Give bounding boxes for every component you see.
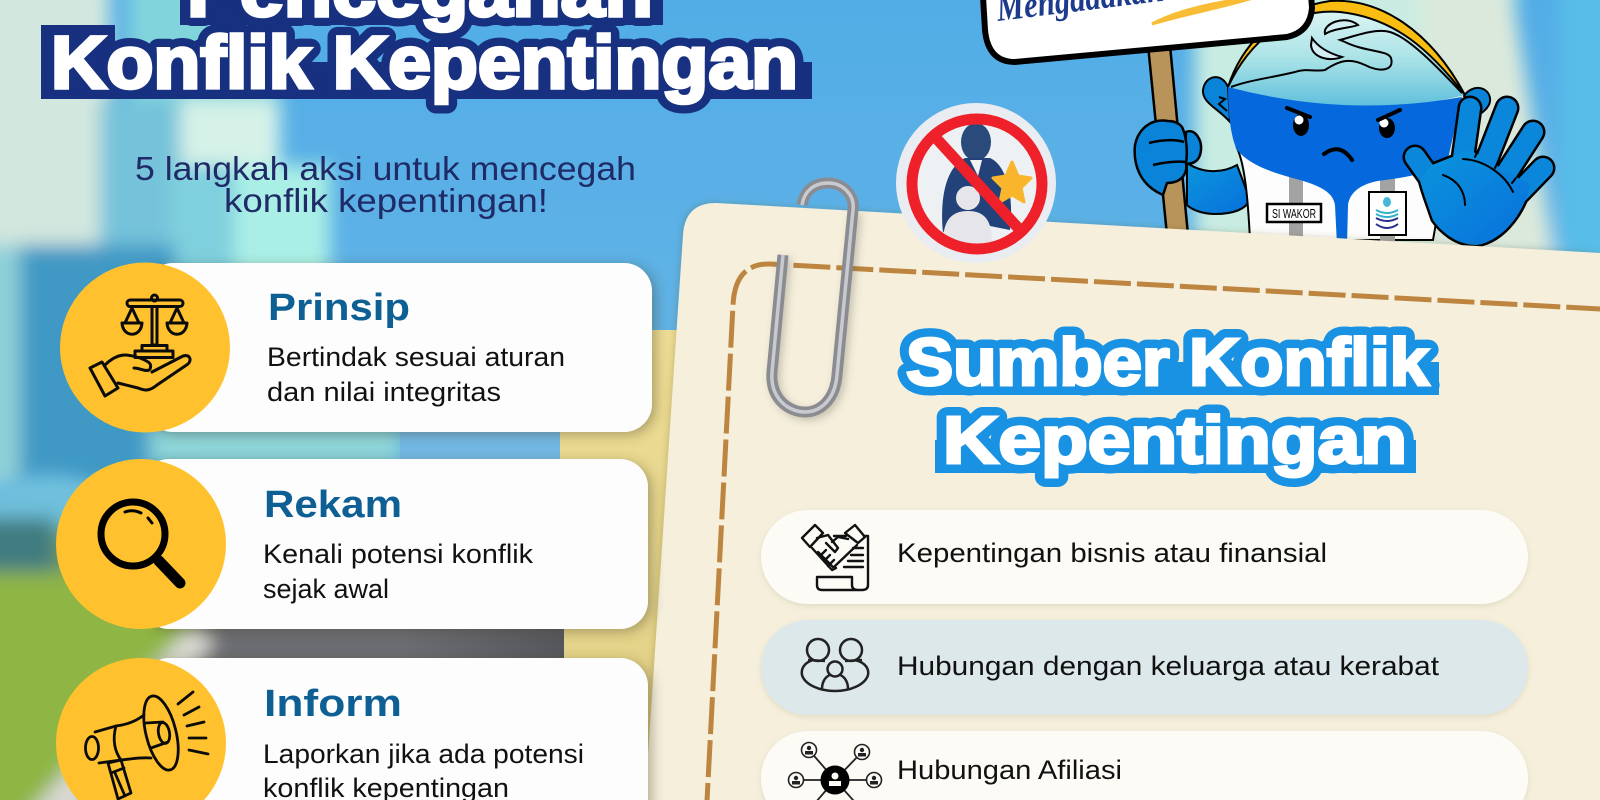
card text: dan nilai integritas (267, 377, 501, 407)
icon: sign stick (1148, 45, 1188, 235)
heading: Sumber Konflik Kepentingan: Sumber Konflik (906, 325, 1430, 400)
pill text: Hubungan dengan keluarga atau kerabat (897, 651, 1440, 681)
pill: business interests (761, 510, 1528, 604)
card heading: Rekam (264, 484, 402, 526)
mascot: Si Wakor holding a sign (1135, 1, 1543, 248)
subtitle (135, 150, 636, 219)
fist holding stick (1135, 121, 1201, 195)
card text: Bertindak sesuai aturan (267, 342, 565, 372)
raised open hand (1415, 108, 1543, 245)
title: Konflik Kepentingan (51, 21, 798, 104)
body: white coat (1237, 148, 1447, 240)
arm (1187, 163, 1250, 214)
card text: Laporkan jika ada potensi (263, 739, 584, 769)
name tag: SI WAKOR (1272, 207, 1316, 221)
icon: magnifying glass (101, 502, 180, 583)
card heading: Inform (264, 683, 402, 725)
pill: affiliation (761, 731, 1528, 800)
card: Prinsip (60, 262, 652, 432)
dome head (1228, 1, 1465, 108)
pill: family relationships (761, 620, 1528, 715)
card text (267, 342, 565, 407)
subtitle: konflik kepentingan! (224, 182, 548, 219)
pill text: Kepentingan bisnis atau finansial (897, 538, 1327, 568)
card text (263, 539, 534, 604)
water wave on head (1231, 20, 1462, 93)
heading: Sumber Konflik Kepentingan: Kepentingan (943, 403, 1407, 478)
card text: Kenali potensi konflik (263, 539, 534, 569)
ears (1203, 77, 1490, 122)
card text: sejak awal (263, 574, 389, 604)
subtitle: 5 langkah aksi untuk mencegah (135, 150, 636, 187)
pill text: Hubungan Afiliasi (897, 755, 1122, 785)
coat straps (1289, 175, 1395, 248)
panel: paper sheet (645, 203, 1600, 800)
icon: prohibition badge (896, 103, 1056, 263)
head band (1228, 1, 1465, 95)
icon: megaphone (86, 692, 208, 799)
heading: Sumber Konflik Kepentingan (906, 325, 1439, 478)
name tag (1267, 204, 1321, 222)
heading: Sumber Konflik Kepentingan: Sumber Konflik (906, 325, 1430, 400)
icon: family group (802, 639, 868, 691)
eyes, brows and mouth (1219, 97, 1400, 160)
badge with water logo (1369, 192, 1406, 235)
title: Konflik Kepentingan (51, 21, 798, 104)
card: Rekam (56, 459, 648, 629)
icon: scales on a hand (90, 295, 190, 396)
card text (263, 739, 584, 800)
icon: paperclip (772, 183, 856, 415)
card heading: Prinsip (268, 287, 410, 329)
icon: network (788, 742, 882, 800)
sign board (982, 0, 1312, 62)
face: blue mask (1228, 87, 1462, 245)
heading: Sumber Konflik Kepentingan: Kepentingan (943, 403, 1407, 478)
card: Inform (56, 658, 648, 800)
dashed stitch border (706, 264, 1600, 800)
icon: handshake and document (802, 525, 868, 590)
sign swoosh (1152, 0, 1256, 24)
